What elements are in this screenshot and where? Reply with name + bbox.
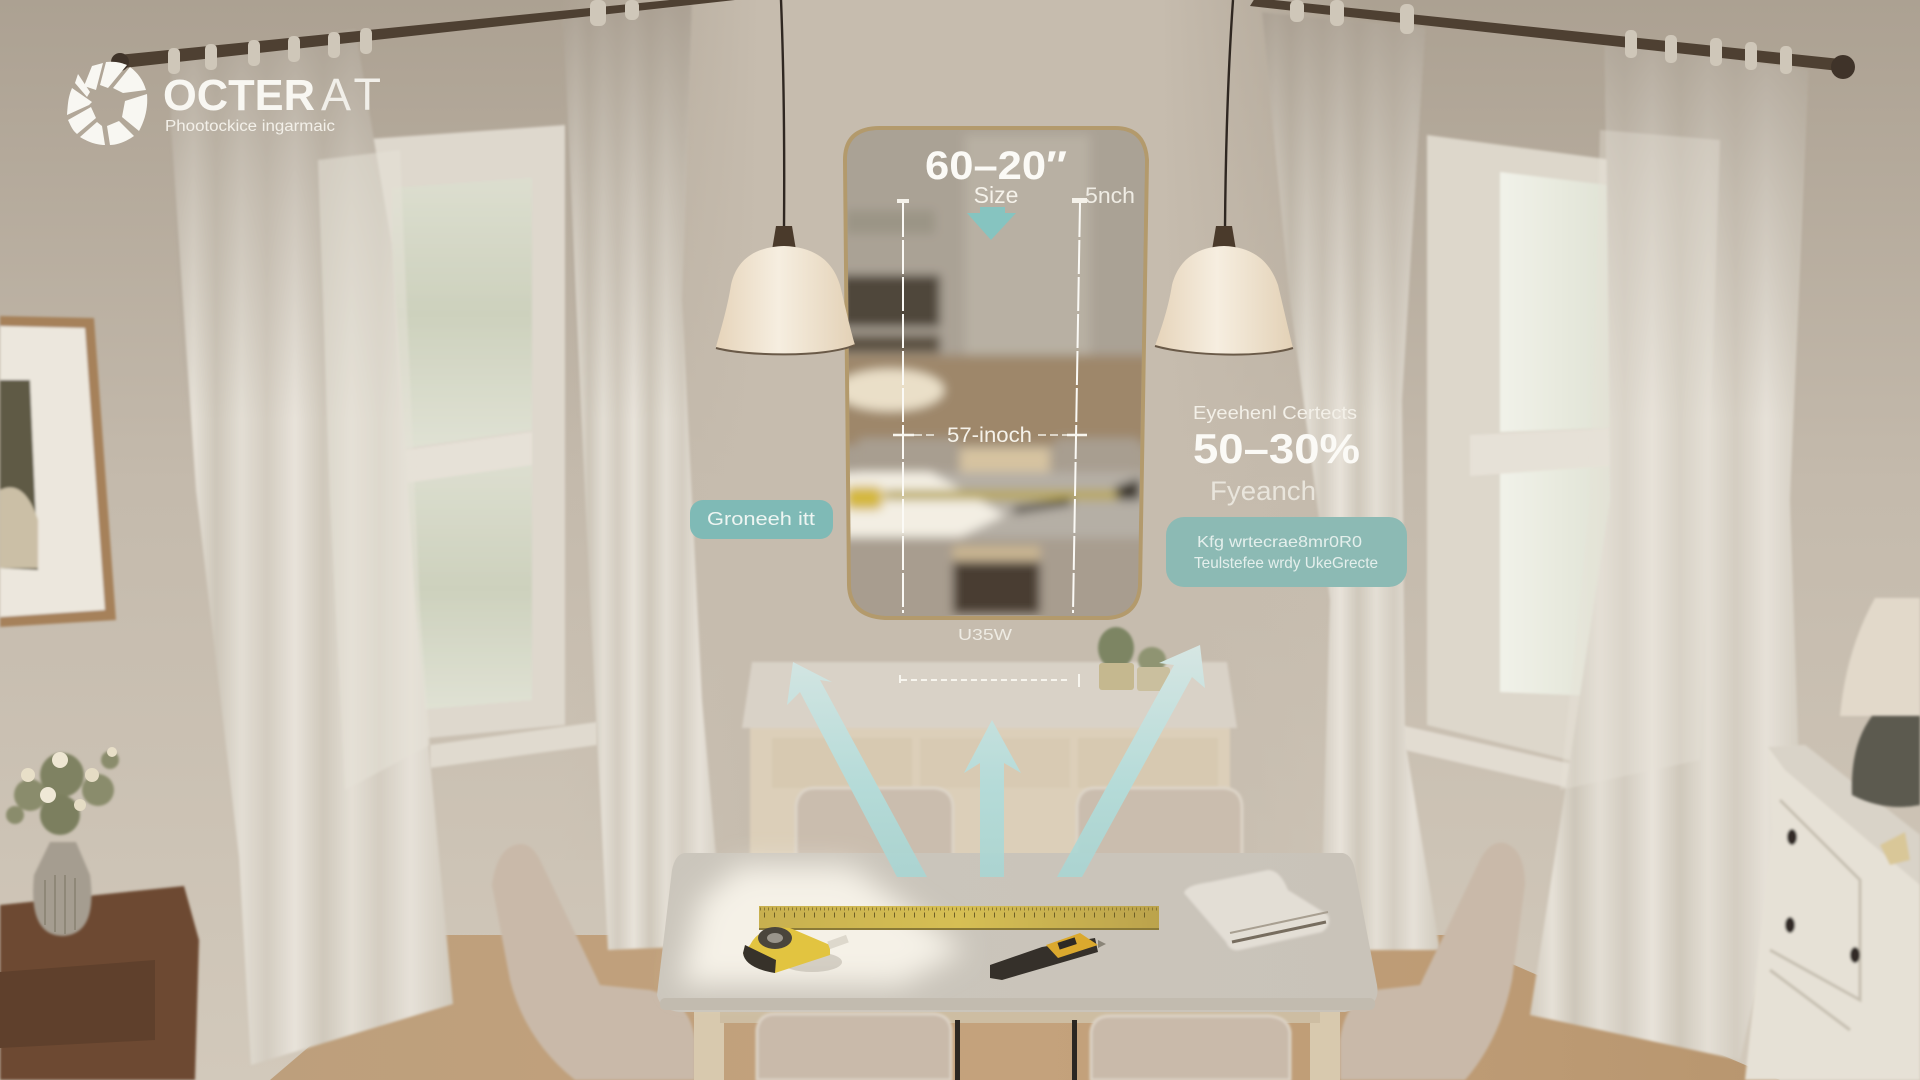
bottom dashed measure [900,674,1079,687]
mirror [843,126,1149,620]
left teal pill label: Groneeh itt [707,509,815,529]
tape measure [743,927,849,973]
right teal callout: Teulstefee wrdy UkeGrecte [1194,555,1378,572]
logo wordmark: OCTER [163,71,315,120]
right dresser [1745,745,1920,1080]
right teal callout: Kfg wrtecrae8mr0R0 [1197,534,1362,551]
logo tagline: Phootockice ingarmaic [165,118,335,135]
vertical dashed guide: left [897,199,909,613]
arrow: left [787,662,927,877]
eye height stat block: 50–30% [1193,425,1360,472]
dining table [657,853,1378,1080]
eye height stat block: Eyeehenl Certects [1193,403,1357,423]
right pendant lamp [1155,0,1293,355]
mirror size heading: 60–20″ [925,144,1067,188]
bottom width label: U35W [958,627,1013,644]
left side table with flowers [0,747,199,1080]
yellow ruler [759,906,1159,930]
right teal callout [1166,517,1407,587]
curtain rods with rings [111,0,1855,79]
logo wordmark [163,69,381,120]
size label: Size [974,182,1018,208]
arrow: right [1057,645,1205,877]
logo wordmark: AT [321,69,381,120]
left curtains [171,4,724,1065]
eye height stat block: Fyeanch [1210,476,1316,506]
side dining chairs [492,843,1525,1080]
horizontal width guide: 57-inoch [947,424,1032,447]
front dining chairs [757,1014,1290,1080]
teal sightline arrows [787,645,1205,877]
folded towel [1184,870,1329,950]
arrow: centre [964,720,1021,877]
right measurement label: 5nch [1085,183,1135,208]
right window [1396,135,1690,800]
plants on sideboard [1098,627,1170,691]
right table lamp [1840,598,1920,807]
back dining chairs [796,788,1242,860]
utility knife [990,933,1106,980]
left teal pill label [690,500,833,539]
eye height stat block [1193,403,1360,506]
size down arrow [967,207,1016,240]
left window [355,125,597,768]
vertical dashed guide: right [1072,198,1087,613]
logo icon [67,62,147,145]
mirror reflection [847,130,1145,615]
right curtains [1262,12,1808,1060]
wall art [0,316,116,627]
left pendant lamp [716,0,855,354]
sideboard [742,662,1237,856]
